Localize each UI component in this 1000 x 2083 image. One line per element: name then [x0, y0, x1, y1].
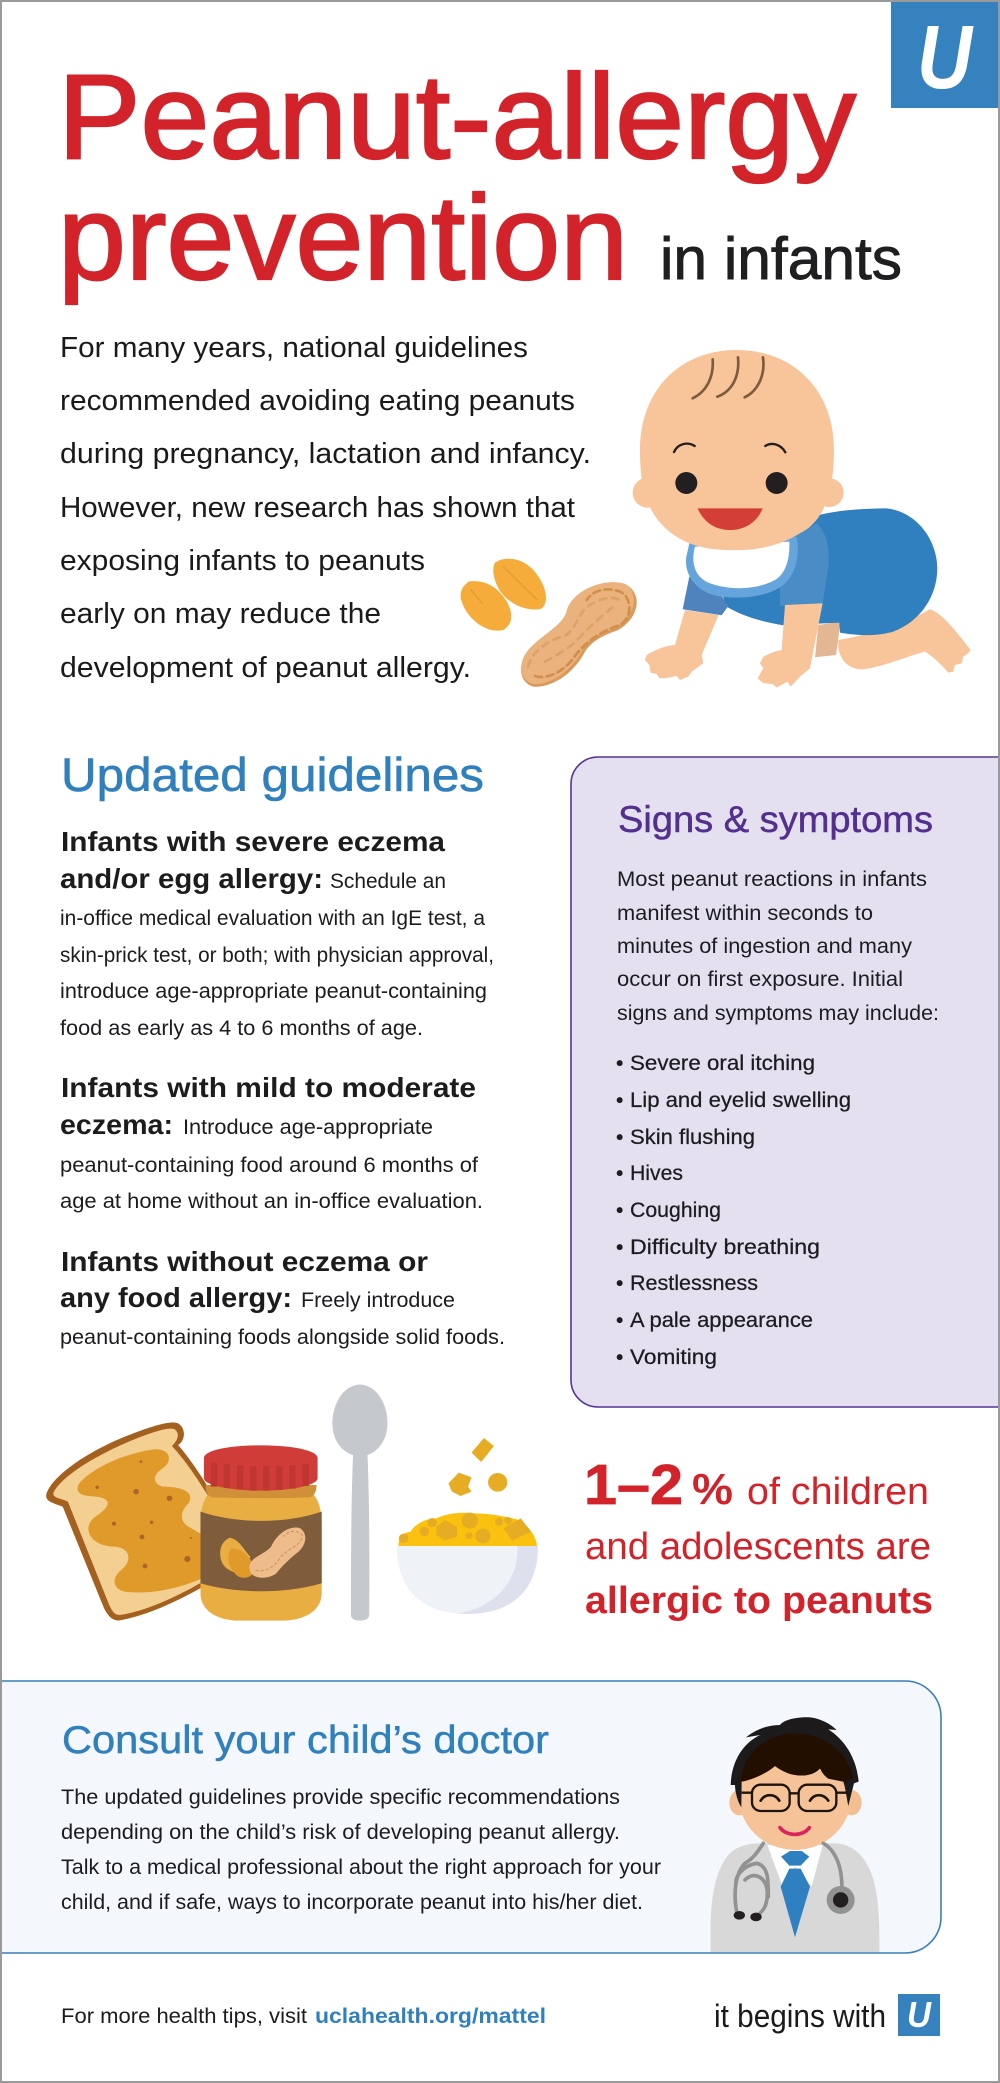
symptoms intro text: manifest within seconds to: [617, 902, 873, 925]
symptoms list: Hives: [630, 1162, 683, 1185]
intro paragraph: during pregnancy, lactation and infancy.: [60, 438, 591, 470]
romper body: [713, 508, 937, 635]
logo: U badge top right: [891, 2, 1000, 108]
title: prevention: [58, 171, 628, 305]
symptoms list: •: [616, 1126, 623, 1149]
guideline: severe eczema: Schedule an: [330, 870, 446, 893]
mouth: [698, 508, 763, 530]
guideline: mild to moderate eczema: Infants with mild to moderate: [61, 1072, 476, 1103]
eyes: [675, 472, 697, 494]
symptoms list: A pale appearance: [630, 1309, 813, 1332]
jar: [200, 1445, 322, 1621]
consult body text: child, and if safe, ways to incorporate peanut into his/her diet.: [61, 1891, 643, 1914]
symptoms list: Severe oral itching: [630, 1052, 815, 1075]
footer link text: For more health tips, visit: [61, 2005, 307, 2028]
symptoms intro text: occur on first exposure. Initial: [617, 968, 903, 991]
glasses: [742, 1785, 847, 1811]
collar: [767, 1845, 823, 1888]
stethoscope: [735, 1843, 842, 1916]
callout: 1-2 percent statistic: %: [692, 1465, 733, 1514]
intro paragraph: recommended avoiding eating peanuts: [60, 385, 575, 417]
guideline: no eczema or allergy: Infants without eczema or: [61, 1246, 428, 1277]
footer link text: [61, 2005, 546, 2028]
icon: doctor: [711, 1717, 879, 1952]
symptoms intro text: minutes of ingestion and many: [617, 935, 913, 958]
consult body text: Talk to a medical professional about the right approach for your: [61, 1856, 661, 1879]
symptoms list: Restlessness: [630, 1272, 758, 1295]
mouth: [780, 1828, 809, 1834]
consult body text: The updated guidelines provide specific recommendations: [61, 1786, 620, 1809]
intro paragraph: exposing infants to peanuts: [60, 545, 425, 577]
callout: 1-2 percent statistic: allergic to peanuts: [585, 1580, 933, 1622]
symptoms list: •: [616, 1199, 623, 1222]
title: [58, 50, 902, 305]
guideline: mild to moderate eczema: [60, 1072, 483, 1213]
face: [738, 1740, 852, 1850]
icon: peanut butter toast, jar, spoon and cereal bowl: [46, 1385, 538, 1621]
eyes: [761, 1795, 828, 1801]
panel: consult your child's doctor: [0, 1681, 941, 1953]
consult body text: depending on the child’s risk of developing peanut allergy.: [61, 1821, 620, 1844]
ears: [729, 1790, 749, 1815]
guideline: no eczema or allergy: any food allergy:: [60, 1282, 292, 1313]
left sleeve: [683, 577, 728, 615]
guideline: severe eczema: introduce age-appropriate peanut-containing: [60, 980, 487, 1003]
footer link text: uclahealth.org/mattel: [315, 2005, 546, 2028]
symptoms list: •: [616, 1272, 623, 1295]
symptoms list: •: [616, 1346, 623, 1369]
spoon: [332, 1385, 387, 1621]
symptoms list: [616, 1052, 851, 1369]
symptoms intro text: [617, 868, 939, 1025]
guideline: severe eczema: Infants with severe eczema: [61, 826, 446, 857]
consult body text: [61, 1786, 661, 1914]
symptoms list: •: [616, 1052, 623, 1075]
symptoms list: Difficulty breathing: [630, 1236, 820, 1259]
guideline: mild to moderate eczema: eczema:: [60, 1109, 173, 1140]
hip: [815, 622, 841, 657]
title: Peanut-allergy: [58, 50, 856, 184]
heading: updated guidelines: Updated guidelines: [61, 748, 484, 801]
title: in infants: [660, 226, 902, 292]
symptoms list: •: [616, 1309, 623, 1332]
callout: 1-2 percent statistic: and adolescents are: [585, 1526, 931, 1568]
guideline: severe eczema: [60, 826, 494, 1040]
icon: peanuts: [461, 559, 637, 687]
cereal bowl: [397, 1438, 538, 1614]
heading: consult: Consult your child’s doctor: [62, 1719, 549, 1762]
symptoms list: Coughing: [630, 1199, 721, 1222]
intro paragraph: early on may reduce the: [60, 598, 381, 630]
guideline: mild to moderate eczema: age at home without an in-office evaluation.: [60, 1190, 483, 1213]
guideline: severe eczema: in-office medical evaluation with an IgE test, a: [60, 907, 485, 930]
icon: crawling baby: [633, 350, 971, 688]
guideline: no eczema or allergy: peanut-containing foods alongside solid foods.: [60, 1326, 505, 1349]
panel: signs and symptoms: [571, 757, 1000, 1407]
symptoms list: •: [616, 1162, 623, 1185]
bib: [686, 537, 798, 598]
intro paragraph: However, new research has shown that: [60, 492, 575, 524]
footer tagline with U logo: U: [907, 1994, 932, 2035]
guideline: no eczema or allergy: [60, 1246, 505, 1349]
symptoms list: •: [616, 1236, 623, 1259]
right arm: [758, 603, 823, 688]
footer tagline with U logo: it begins with: [714, 1998, 886, 2034]
ears: [633, 478, 663, 508]
callout: 1-2 percent statistic: [584, 1453, 933, 1622]
left arm: [645, 610, 719, 680]
guideline: severe eczema: and/or egg allergy:: [60, 863, 323, 894]
hair: [693, 357, 763, 398]
guideline: severe eczema: skin-prick test, or both; with physician approval,: [60, 944, 494, 967]
hair: [731, 1717, 859, 1807]
intro paragraph: development of peanut allergy.: [60, 652, 471, 684]
head: [640, 350, 834, 550]
symptoms list: Skin flushing: [630, 1126, 755, 1149]
callout: 1-2 percent statistic: 1–2: [584, 1453, 683, 1517]
symptoms list: Lip and eyelid swelling: [630, 1089, 851, 1112]
guideline: no eczema or allergy: Freely introduce: [301, 1289, 455, 1312]
logo: U badge top right: U: [917, 8, 974, 108]
symptoms list: Vomiting: [630, 1346, 717, 1369]
intro paragraph: [60, 332, 591, 684]
symptoms list: •: [616, 1089, 623, 1112]
guideline: severe eczema: food as early as 4 to 6 months of age.: [60, 1017, 423, 1040]
symptoms intro text: signs and symptoms may include:: [617, 1002, 939, 1025]
symptoms intro text: Most peanut reactions in infants: [617, 868, 927, 891]
back leg: [838, 609, 971, 673]
tie: [781, 1851, 810, 1937]
toast: [46, 1422, 216, 1621]
right sleeve: [780, 523, 829, 606]
guideline: mild to moderate eczema: peanut-containing food around 6 months of: [60, 1154, 478, 1177]
guideline: mild to moderate eczema: Introduce age-appropriate: [183, 1116, 433, 1139]
heading: signs and symptoms: Signs & symptoms: [618, 799, 933, 840]
callout: 1-2 percent statistic: of children: [747, 1471, 929, 1513]
intro paragraph: For many years, national guidelines: [60, 332, 528, 364]
white coat: [711, 1843, 879, 1952]
